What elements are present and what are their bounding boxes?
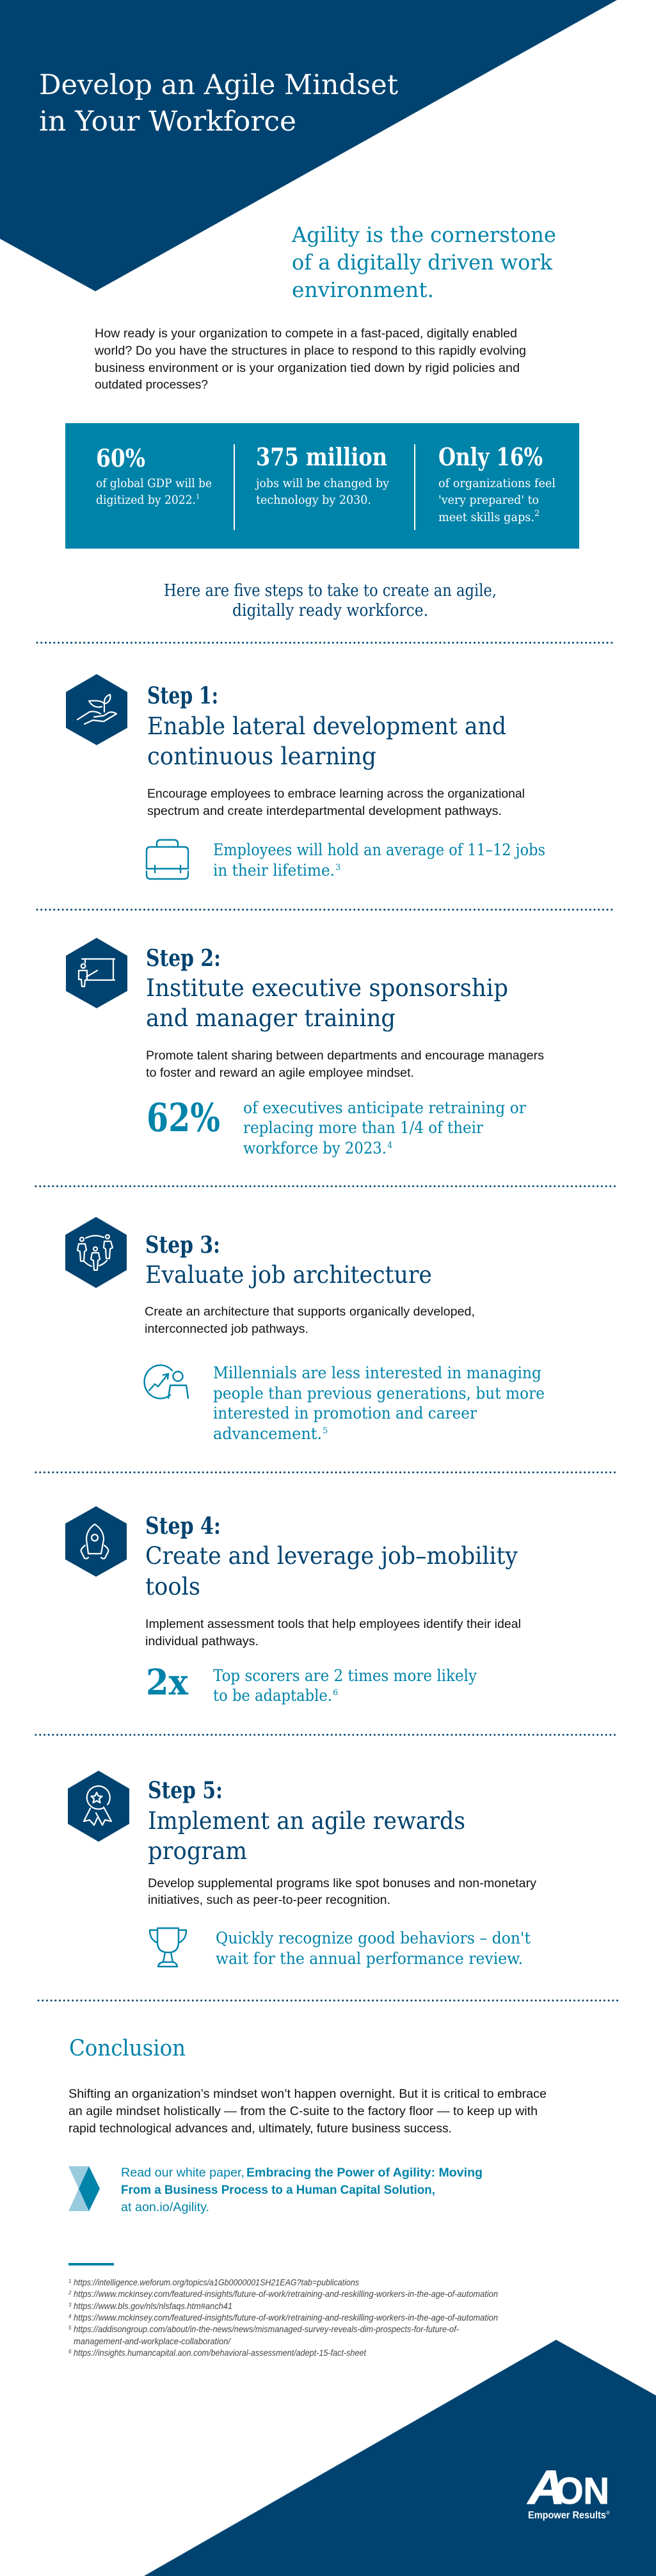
call to action: white paper: Read our white paper, <box>121 2166 244 2180</box>
text: step 4 description: individual pathways. <box>145 1635 259 1648</box>
icon: chevron diamond <box>68 2166 100 2211</box>
stat: only 16%: 2 <box>534 509 540 519</box>
footnotes: 4 <box>68 2314 72 2319</box>
text: step 5 description <box>148 1877 537 1907</box>
title: Develop an Agile Mindset <box>39 69 398 101</box>
panel: step 4 <box>65 1506 521 1705</box>
subtitle: Agility is the cornerstone <box>291 222 556 247</box>
stat: 375 million jobs: 375 million <box>256 442 387 471</box>
heading: step 2: Institute executive sponsorship <box>146 974 508 1002</box>
heading: step 1: Step 1: <box>147 682 218 709</box>
text: step 3 description: interconnected job pathways. <box>145 1323 308 1336</box>
text: step 1 description: spectrum and create interdepartmental development pathways. <box>147 805 502 818</box>
stat: 60% GDP: 1 <box>196 494 200 501</box>
callout: millennials: people than previous generations, but more <box>213 1384 545 1403</box>
heading: step 5: Implement an agile rewards <box>148 1807 465 1835</box>
callout: executives retraining: workforce by 2023. <box>243 1139 387 1158</box>
text: step 1 description: Encourage employees to embrace learning across the organizational <box>147 787 525 801</box>
stat: 60% GDP <box>96 444 212 507</box>
top navy banner shape <box>0 0 617 291</box>
heading: step 4: Create and leverage job–mobility <box>145 1542 518 1570</box>
panel: step 1 <box>66 674 545 880</box>
icon: briefcase <box>147 840 188 879</box>
heading: step 3: Evaluate job architecture <box>145 1261 432 1289</box>
stat: only 16%: of organizations feel <box>438 476 556 490</box>
heading: step 4: tools <box>145 1573 200 1600</box>
panel: key statistics <box>65 423 579 549</box>
callout: jobs in a lifetime: 3 <box>335 863 340 873</box>
callout: top scorers <box>213 1666 477 1705</box>
logo: Aon Empower Results: ® <box>606 2510 610 2516</box>
stat: 375 million jobs: technology by 2030. <box>256 493 371 507</box>
text: step 3 description: Create an architecture that supports organically developed, <box>145 1305 475 1319</box>
callout: recognize behaviors: wait for the annual performance review. <box>216 1949 523 1968</box>
logo: Aon Empower Results: ON <box>556 2470 609 2512</box>
footnotes: 5 <box>68 2325 72 2331</box>
footnotes: 3 <box>68 2302 72 2308</box>
call to action: white paper <box>121 2166 483 2214</box>
heading: step 5: Step 5: <box>148 1777 223 1804</box>
stat: 60% GDP: digitized by 2022. <box>96 493 196 507</box>
callout: millennials: interested in promotion and career <box>213 1404 477 1423</box>
panel: step 2 <box>66 938 544 1158</box>
callout: top scorers: 6 <box>333 1688 338 1698</box>
text: step 5 description: initiatives, such as peer-to-peer recognition. <box>148 1894 390 1907</box>
callout: executives retraining: 4 <box>387 1141 392 1150</box>
footnotes: 2 <box>68 2290 72 2296</box>
call to action: white paper: at aon.io/Agility. <box>121 2200 209 2214</box>
title: in Your Workforce <box>39 106 296 138</box>
heading: conclusion: Conclusion <box>69 2036 186 2061</box>
stat: 375 million jobs <box>255 442 389 507</box>
heading: step 2 <box>146 945 508 1032</box>
intro text <box>94 327 526 392</box>
call to action: white paper: Embracing the Power of Agility: Moving <box>246 2166 483 2180</box>
footnotes: https://intelligence.weforum.org/topics/a1Gb0000001SH21EAG?tab=publications <box>74 2277 359 2287</box>
big number: 62%: 62% <box>147 1095 220 1141</box>
heading: step 2: Step 2: <box>146 945 221 972</box>
panel: step 5 <box>68 1771 537 1968</box>
icon: trophy <box>150 1928 186 1967</box>
footnotes: 1 <box>68 2278 71 2284</box>
callout: top scorers: Top scorers are 2 times more likely <box>213 1666 477 1686</box>
callout: recognize behaviors: Quickly recognize good behaviors – don't <box>216 1929 531 1948</box>
footnotes: management-and-workplace-collaboration/ <box>74 2336 232 2346</box>
stat: only 16%: 'very prepared' to <box>438 493 539 507</box>
callout: jobs in a lifetime: Employees will hold an average of 11–12 jobs <box>213 841 545 860</box>
text: step 4 description <box>145 1618 521 1648</box>
callout: executives retraining: replacing more than 1/4 of their <box>243 1118 484 1138</box>
intro text: business environment or is your organization tied down by rigid policies and <box>95 362 520 375</box>
footnotes: https://www.mckinsey.com/featured-insights/future-of-work/retraining-and-reskilling-workers-in-the-age-of-automation <box>74 2289 498 2299</box>
stat: 60% GDP: 60% <box>96 444 145 472</box>
five steps lead-in <box>164 581 497 620</box>
callout: executives retraining: of executives anticipate retraining or <box>243 1099 527 1118</box>
footnotes: https://www.bls.gov/nls/nlsfaqs.htm#anch41 <box>74 2301 232 2311</box>
callout: top scorers: to be adaptable. <box>213 1686 332 1705</box>
five steps lead-in: digitally ready workforce. <box>232 601 428 620</box>
footnotes: 6 <box>68 2349 72 2355</box>
logo: Aon Empower Results: A <box>527 2460 565 2514</box>
call to action: white paper: From a Business Process to a Human Capital Solution, <box>121 2183 435 2197</box>
callout: jobs in a lifetime: in their lifetime. <box>213 861 335 880</box>
heading: step 4 <box>145 1513 518 1600</box>
subtitle: of a digitally driven work <box>292 250 553 275</box>
icon: award ribbon <box>68 1771 129 1842</box>
callout: millennials: advancement. <box>213 1424 322 1444</box>
callout: millennials <box>213 1364 545 1444</box>
text: step 4 description: Implement assessment tools that help employees identify their ideal <box>145 1618 521 1631</box>
panel: conclusion <box>68 2036 547 2214</box>
callout: millennials: 5 <box>323 1426 328 1436</box>
panel: step 3 <box>65 1217 545 1444</box>
callout: executives retraining <box>243 1099 527 1158</box>
subtitle <box>291 222 556 302</box>
intro text: world? Do you have the structures in place to respond to this rapidly evolving <box>94 344 526 358</box>
callout: millennials: Millennials are less interested in managing <box>213 1364 541 1383</box>
big number: 2x: 2x <box>146 1661 189 1703</box>
text: step 2 description: Promote talent sharing between departments and encourage managers <box>146 1049 544 1063</box>
text: step 2 description: to foster and reward an agile employee mindset. <box>146 1067 414 1080</box>
footnotes: https://insights.humancapital.aon.com/behavioral-assessment/adept-15-fact-sheet <box>74 2347 367 2358</box>
text: conclusion body <box>68 2088 547 2136</box>
heading: step 5: program <box>148 1837 247 1865</box>
heading: step 1: Enable lateral development and <box>147 712 506 740</box>
icon: presenter at board <box>66 938 127 1008</box>
heading: step 1: continuous learning <box>147 743 376 770</box>
five steps lead-in: Here are five steps to take to create an agile, <box>164 581 497 600</box>
text: step 5 description: Develop supplemental programs like spot bonuses and non-monetary <box>148 1877 537 1890</box>
stat: only 16%: Only 16% <box>438 442 543 471</box>
text: step 1 description <box>147 787 525 818</box>
heading: step 5 <box>148 1777 465 1865</box>
heading: step 3 <box>145 1232 432 1289</box>
text: conclusion body: an agile mindset holistically — from the C-suite to the factory floor — to keep up with <box>68 2105 538 2118</box>
callout: jobs in a lifetime <box>213 841 545 880</box>
footnotes <box>68 2277 498 2358</box>
text: step 3 description <box>145 1305 475 1336</box>
stat: only 16%: meet skills gaps. <box>438 510 534 524</box>
stat: only 16% <box>438 442 556 524</box>
title <box>39 69 398 138</box>
heading: step 3: Step 3: <box>145 1232 220 1259</box>
footnotes: https://www.mckinsey.com/featured-insights/future-of-work/retraining-and-reskilling-workers-in-the-age-of-automation <box>74 2312 498 2322</box>
footnotes: https://addisongroup.com/about/in-the-news/news/mismanaged-survey-reveals-dim-prospects-for-future-of- <box>74 2324 459 2334</box>
callout: recognize behaviors <box>216 1929 531 1968</box>
icon: rocket <box>65 1506 127 1577</box>
logo: Aon Empower Results: Empower Results <box>528 2510 606 2521</box>
stat: 60% GDP: of global GDP will be <box>96 476 212 490</box>
stat: 375 million jobs: jobs will be changed by <box>255 476 389 490</box>
logo: Aon Empower Results <box>527 2460 610 2521</box>
text: conclusion body: rapid technological advances and, ultimately, future business success. <box>68 2122 452 2136</box>
text: conclusion body: Shifting an organization’s mindset won’t happen overnight. But it is critical to embrace <box>68 2088 547 2101</box>
bottom navy corner shape <box>144 2340 656 2576</box>
icon: growth chart and person <box>145 1365 188 1399</box>
heading: step 4: Step 4: <box>145 1513 221 1540</box>
text: step 2 description <box>146 1049 544 1080</box>
intro text: How ready is your organization to compete in a fast-paced, digitally enabled <box>95 327 517 341</box>
heading: step 1 <box>147 682 506 770</box>
heading: step 2: and manager training <box>146 1004 396 1032</box>
icon: people in a circle <box>65 1217 127 1288</box>
intro text: outdated processes? <box>95 378 208 392</box>
subtitle: environment. <box>292 277 434 302</box>
icon: hand holding plant <box>66 674 127 745</box>
